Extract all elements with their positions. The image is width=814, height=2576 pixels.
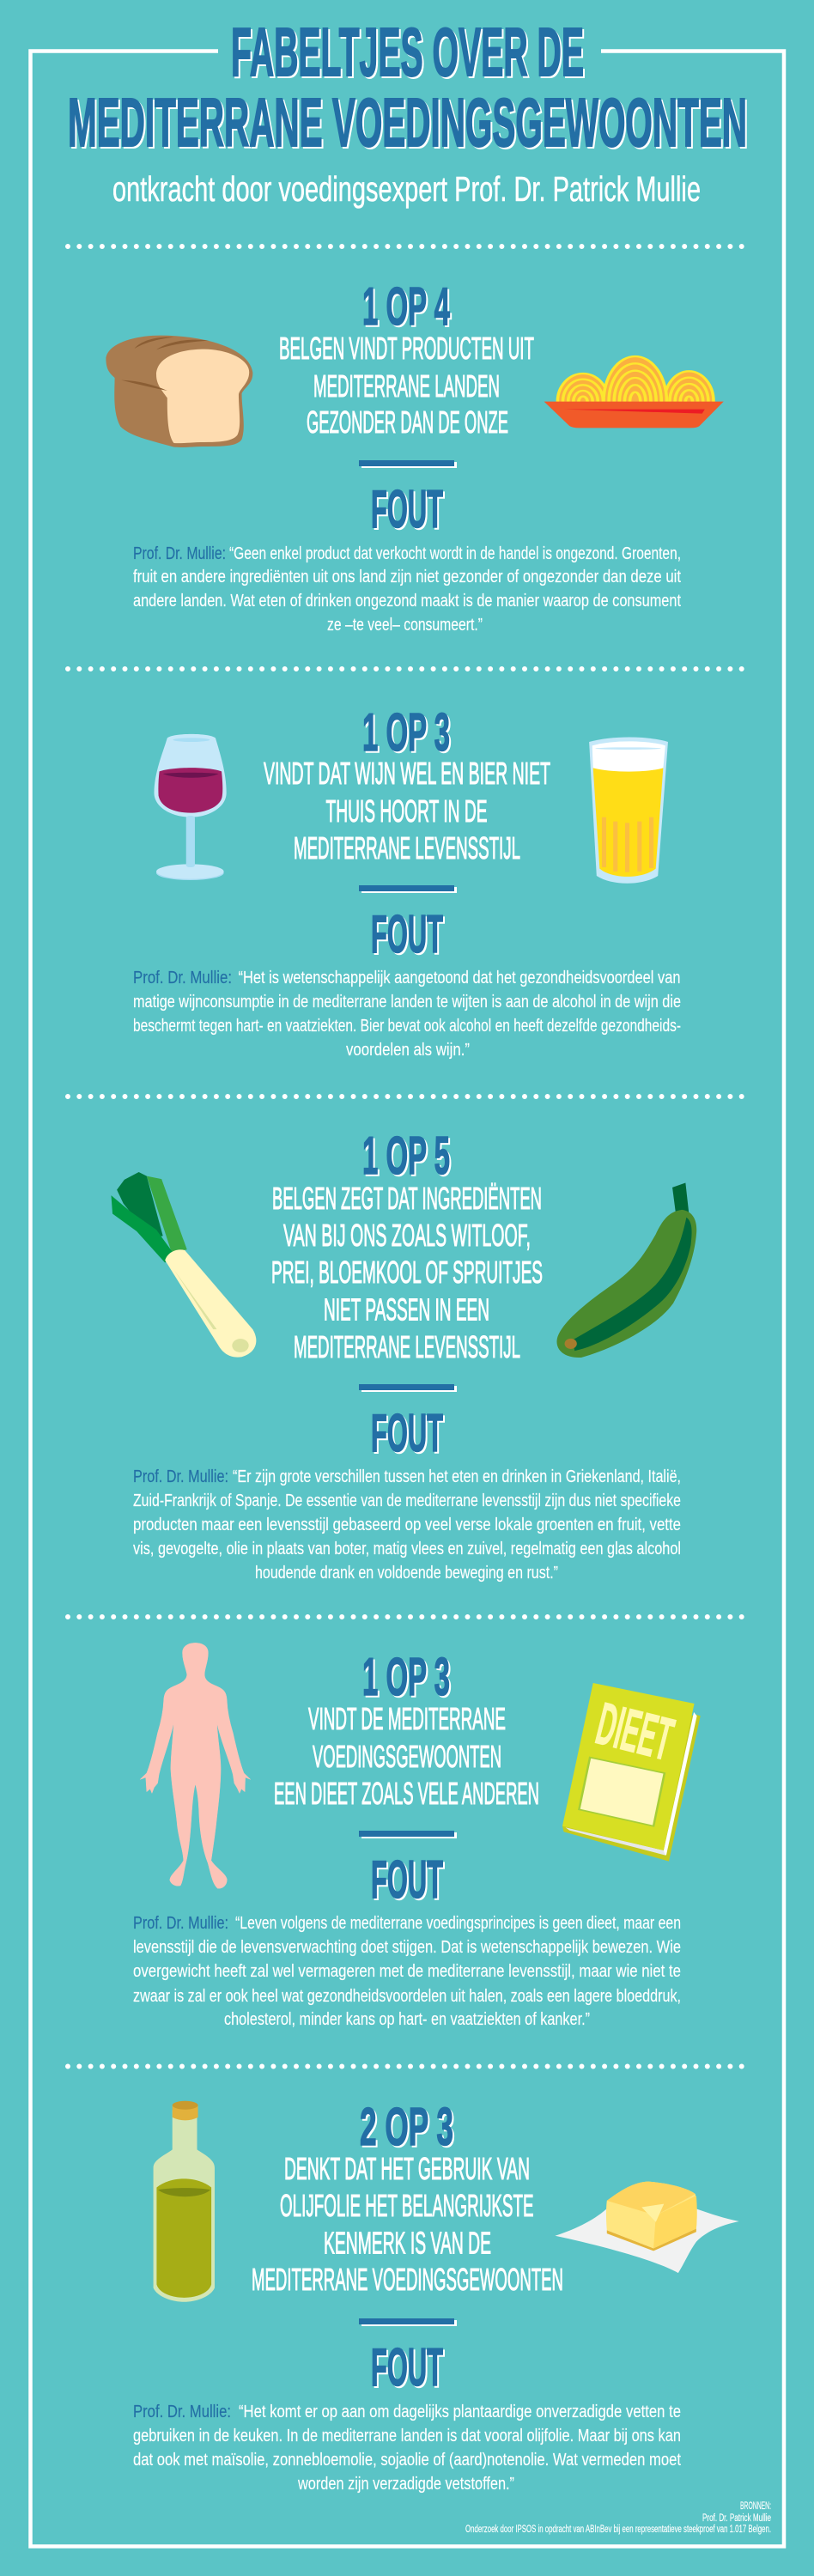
myth statement (271, 1181, 543, 1364)
expert quote: cholesterol, minder kans op hart- en vaatziekten of kanker.” (224, 2010, 590, 2029)
sources (465, 2501, 771, 2535)
expert quote: matige wijnconsumptie in de mediterrane landen te wijten is aan de alcohol in de wijn die (133, 993, 681, 1012)
myth statement (264, 756, 550, 866)
panel: myth 2: FOUT (371, 905, 443, 964)
statistic: 1 OP 3 (362, 1648, 450, 1707)
statistic: 2 OP 3 (360, 2098, 453, 2157)
myth statement: VAN BIJ ONS ZOALS WITLOOF, (283, 1218, 531, 1253)
expert quote (133, 544, 681, 635)
statistic: 1 OP 5 (362, 1127, 450, 1186)
icon: courgette (556, 1182, 696, 1358)
myth statement: VINDT DE MEDITERRANE (308, 1701, 506, 1736)
expert quote: vis, gevogelte, olie in plaats van boter, matig vlees en zuivel, regelmatig een glas alcohol (133, 1540, 681, 1558)
myth statement: OLIJFOLIE HET BELANGRIJKSTE (280, 2188, 534, 2223)
statistic: 1 OP 4 (362, 277, 450, 337)
sources: Prof. Dr. Patrick Mullie (702, 2513, 771, 2524)
divider bar (359, 1384, 457, 1392)
expert quote (133, 1467, 681, 1583)
panel: myth 4: FOUT (371, 1850, 443, 1910)
expert quote: overgewicht heeft zal wel vermageren met de mediterrane levensstijl, maar wie niet te (133, 1962, 681, 1981)
expert quote: producten maar een levensstijl gebaseerd op veel verse lokale groenten en fruit, vette (133, 1516, 681, 1534)
panel: myth 5 (133, 2098, 739, 2494)
expert quote: Prof. Dr. Mullie: (133, 969, 232, 987)
sources: BRONNEN: (740, 2501, 771, 2512)
expert quote (133, 969, 681, 1060)
expert quote: “Het komt er op aan om dagelijks plantaardige onverzadigde vetten te (239, 2403, 681, 2421)
myth statement: THUIS HOORT IN DE (326, 793, 488, 829)
expert quote: Zuid-Frankrijk of Spanje. De essentie van de mediterrane levensstijl zijn dus niet specifieke (133, 1492, 681, 1510)
icon: diet book (562, 1683, 701, 1862)
myth statement: GEZONDER DAN DE ONZE (307, 404, 508, 440)
expert quote: “Leven volgens de mediterrane voedingsprincipes is geen dieet, maar een (235, 1914, 681, 1933)
myth statement (274, 1701, 539, 1811)
icon: beer glass (589, 737, 668, 884)
myth statement: MEDITERRANE LANDEN (313, 368, 500, 404)
expert quote: levensstijl die de levensverwachting doet stijgen. Dat is wetenschappelijk bewezen. Wie (133, 1938, 681, 1957)
icon: bread (106, 336, 252, 447)
panel: myth 5: FOUT (371, 2338, 443, 2397)
expert quote: worden zijn verzadigde vetstoffen.” (297, 2475, 514, 2494)
icon: human body (140, 1643, 251, 1888)
myth statement (252, 2151, 563, 2297)
expert quote: “Er zijn grote verschillen tussen het eten en drinken in Griekenland, Italië, (233, 1467, 681, 1486)
myth statement: BELGEN ZEGT DAT INGREDIËNTEN (272, 1181, 542, 1216)
myth statement: VOEDINGSGEWOONTEN (313, 1739, 501, 1774)
divider bar (359, 460, 457, 468)
expert quote: Prof. Dr. Mullie: (133, 1467, 228, 1486)
panel: myth 3 (111, 1127, 696, 1583)
panel: myth 2 (133, 703, 681, 1060)
divider bar (359, 1831, 457, 1838)
panel: myth 1 (106, 277, 724, 635)
icon: leek (111, 1172, 256, 1358)
myth statement: NIET PASSEN IN EEN (324, 1291, 489, 1327)
icon: wine glass (154, 734, 227, 880)
expert quote: Prof. Dr. Mullie: (133, 544, 226, 563)
expert quote: dat ook met maïsolie, zonnebloemolie, sojaolie of (aard)notenolie. Wat vermeden moet (133, 2451, 681, 2470)
expert quote (133, 2403, 681, 2494)
myth statement: BELGEN VINDT PRODUCTEN UIT (279, 331, 534, 366)
myth statement: EEN DIEET ZOALS VELE ANDEREN (274, 1776, 539, 1811)
myth statement: PREI, BLOEMKOOL OF SPRUITJES (271, 1255, 543, 1290)
expert quote: ze –te veel– consumeert.” (327, 616, 483, 635)
expert quote: houdende drank en voldoende beweging en rust.” (255, 1564, 558, 1583)
panel: myth 4: DIEET (590, 1690, 680, 1773)
panel: myth 3: FOUT (371, 1404, 443, 1463)
myth statement (279, 331, 534, 440)
icon: pasta bowl (544, 355, 724, 428)
panel: myth 1: FOUT (371, 480, 443, 539)
expert quote: gebruiken in de keuken. In de mediterrane landen is dat vooral olijfolie. Maar bij ons kan (133, 2427, 681, 2445)
divider bar (359, 2318, 457, 2326)
myth statement: KENMERK IS VAN DE (324, 2226, 491, 2260)
title (68, 14, 747, 161)
myth statement: DENKT DAT HET GEBRUIK VAN (284, 2151, 530, 2186)
statistic: 1 OP 3 (362, 703, 450, 762)
panel: myth 4 (133, 1643, 701, 2029)
expert quote: voordelen als wijn.” (346, 1041, 470, 1060)
divider bar (359, 885, 457, 893)
expert quote: “Geen enkel product dat verkocht wordt in de handel is ongezond. Groenten, (229, 544, 681, 563)
expert quote: andere landen. Wat eten of drinken ongezond maakt is de manier waarop de consument (133, 592, 681, 611)
expert quote: Prof. Dr. Mullie: (133, 1914, 228, 1933)
icon: olive oil bottle (154, 2101, 215, 2302)
expert quote: fruit en andere ingrediënten uit ons land zijn niet gezonder of ongezonder dan deze uit (133, 568, 681, 586)
myth statement: MEDITERRANE LEVENSSTIJL (294, 1329, 520, 1364)
expert quote: zwaar is zal er ook heel wat gezondheidsvoordelen uit halen, zoals een lagere bloeddruk, (133, 1987, 681, 2006)
expert quote (133, 1914, 681, 2029)
myth statement: VINDT DAT WIJN WEL EN BIER NIET (264, 756, 550, 791)
expert quote: Prof. Dr. Mullie: (133, 2403, 231, 2421)
icon: butter (555, 2182, 739, 2273)
expert quote: “Het is wetenschappelijk aangetoond dat het gezondheidsvoordeel van (239, 969, 680, 987)
myth statement: MEDITERRANE LEVENSSTIJL (294, 830, 520, 866)
